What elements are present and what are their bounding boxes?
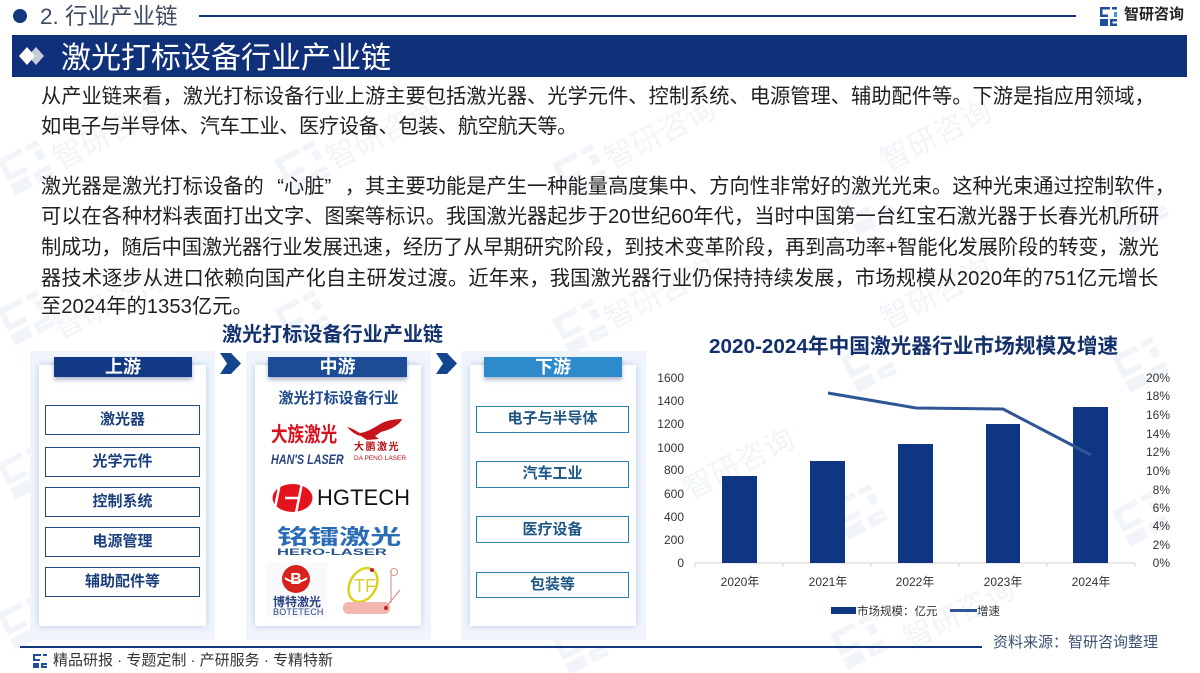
footer rule	[20, 646, 982, 648]
bar and line chart	[657, 371, 1170, 618]
laser paragraph: 可以在各种材料表面打出文字、图案等标识。我国激光器起步于20世纪60年代，当时中国第一台红宝石激光器于长春光机所研	[41, 206, 1159, 228]
item	[476, 516, 629, 543]
right axis: 6%	[1153, 501, 1170, 515]
x labels	[721, 575, 1110, 589]
right axis: 2%	[1153, 538, 1170, 552]
item: 电源管理	[92, 533, 152, 550]
footer text: 精品研报 · 专题定制 · 产研服务 · 专精特新	[53, 652, 333, 669]
watermark pattern: 智研咨询	[599, 92, 721, 176]
watermark pattern: 智研咨询	[48, 262, 170, 346]
watermark pattern: 智研咨询	[321, 92, 443, 176]
upstream heading	[54, 357, 192, 377]
left axis: 800	[664, 463, 684, 477]
item: 激光器	[100, 411, 145, 428]
footer tagline	[33, 652, 333, 669]
upstream card	[39, 365, 206, 626]
laser paragraph: 器技术逐步从进口依赖向国产化自主研发过渡。近年来，我国激光器行业仍保持持续发展，市场规模从2020年的751亿元增长	[41, 268, 1158, 290]
item	[45, 487, 200, 517]
logo: Han's Laser: 大族激光	[271, 423, 337, 446]
section title: 2. 行业产业链	[40, 4, 178, 29]
intro paragraph: 如电子与半导体、汽车工业、医疗设备、包装、航空航天等。	[41, 116, 577, 138]
logo: HGTECH: HGTECH	[317, 485, 410, 510]
logo text: 智研咨询	[1124, 6, 1184, 23]
left axis: 1600	[657, 371, 684, 385]
laser paragraph	[41, 176, 1175, 318]
midstream heading: 中游	[320, 357, 356, 377]
source note: 资料来源：智研咨询整理	[993, 634, 1158, 651]
logo: Han's Laser	[271, 423, 344, 467]
laser paragraph: “	[277, 176, 284, 198]
item	[45, 567, 200, 597]
item: 包装等	[530, 576, 575, 593]
left axis: 0	[677, 556, 684, 570]
logo: TF: TF	[354, 576, 376, 596]
downstream card	[470, 365, 636, 626]
laser paragraph: 制成功，随后中国激光器行业发展迅速，经历了从早期研究阶段，到技术变革阶段，再到高功率+智能化发展阶段的转变，激光	[41, 237, 1159, 259]
logo: Hero Laser: HERO-LASER	[277, 547, 387, 558]
upstream heading: 上游	[105, 357, 141, 377]
legend: 市场规模：亿元	[857, 604, 938, 618]
logo: Bote Tech: BOTETECH	[273, 607, 324, 617]
downstream heading: 下游	[535, 357, 571, 377]
downstream heading	[484, 357, 622, 377]
arrow	[436, 353, 457, 374]
intro paragraph	[41, 85, 1155, 138]
logo: Da Peng Laser	[347, 419, 406, 462]
section bullet	[13, 9, 27, 23]
chain title: 激光打标设备行业产业链	[222, 324, 443, 346]
logo mark	[1100, 7, 1117, 26]
right axis: 16%	[1146, 408, 1170, 422]
laser paragraph: ”	[325, 176, 331, 198]
x axis	[695, 563, 1135, 567]
item: 医疗设备	[522, 521, 582, 538]
midstream subtitle: 激光打标设备行业	[278, 390, 398, 407]
panel: midstream	[246, 351, 431, 640]
watermark pattern: 智研咨询	[875, 252, 997, 336]
logo: Hero Laser: 铭镭激光	[277, 526, 401, 549]
title banner	[12, 35, 1187, 77]
x labels: 2022年	[896, 575, 934, 589]
right axis: 0%	[1153, 556, 1170, 570]
item: 电子与半导体	[507, 410, 598, 427]
legend: 增速	[977, 604, 1000, 618]
laser paragraph: 至2024年的1353亿元。	[41, 296, 253, 318]
x labels: 2024年	[1072, 575, 1110, 589]
x labels: 2023年	[984, 575, 1022, 589]
logo: Da Peng Laser: DA PENG LASER	[354, 455, 406, 462]
x labels: 2020年	[721, 575, 759, 589]
item	[45, 527, 200, 557]
logo: Bote Tech	[267, 562, 327, 617]
logo: Bote Tech: 博特激光	[273, 595, 321, 609]
left axis: 1400	[657, 394, 684, 408]
header rule	[199, 15, 1076, 16]
item: 汽车工业	[522, 465, 582, 482]
right axis: 14%	[1146, 427, 1170, 441]
item	[45, 405, 200, 435]
right axis: 10%	[1146, 464, 1170, 478]
logo: Da Peng Laser: 大鹏激光	[354, 442, 400, 453]
watermark pattern: 智研咨询	[599, 252, 721, 336]
midstream card	[255, 365, 421, 626]
bars: market size	[722, 407, 1108, 563]
right axis: 8%	[1153, 483, 1170, 497]
left axis: 1200	[657, 417, 684, 431]
logo: brand	[1100, 6, 1184, 26]
panel: downstream	[461, 351, 646, 640]
watermark pattern: 智研咨询	[875, 94, 997, 178]
left axis: 600	[664, 487, 684, 501]
logo: HGTECH	[272, 484, 410, 512]
banner title: 激光打标设备行业产业链	[61, 42, 391, 75]
logo: Bote Tech: B	[290, 571, 302, 588]
watermark pattern: 智研咨询	[898, 572, 1020, 656]
item	[476, 461, 629, 488]
footer logo	[33, 654, 47, 668]
right axis: 12%	[1146, 445, 1170, 459]
watermark pattern: 智研咨询	[48, 92, 170, 176]
item	[476, 572, 629, 598]
section header	[13, 4, 1076, 29]
item: 辅助配件等	[85, 573, 160, 590]
banner icon: diamonds	[19, 47, 44, 65]
logo: TF	[343, 566, 400, 614]
item	[476, 406, 629, 433]
logo: Han's Laser: HAN'S LASER	[271, 451, 344, 467]
arrow	[220, 353, 241, 374]
midstream heading	[268, 357, 407, 377]
item: 控制系统	[92, 493, 152, 510]
panel: upstream	[30, 351, 215, 640]
left axis: 400	[664, 510, 684, 524]
watermark pattern: 智研咨询	[678, 422, 800, 506]
x labels: 2021年	[809, 575, 847, 589]
left axis: 1000	[657, 441, 684, 455]
left axis: 200	[664, 533, 684, 547]
right axis: 20%	[1146, 371, 1170, 385]
right axis: 18%	[1146, 389, 1170, 403]
legend	[831, 604, 1000, 618]
right axis	[1146, 371, 1170, 570]
item: 光学元件	[92, 453, 152, 470]
growth line	[828, 393, 1091, 455]
laser paragraph: 激光器是激光打标设备的 心脏 ，其主要功能是产生一种能量高度集中、方向性非常好的激光光束。这种光束通过控制软件，	[41, 176, 1175, 198]
left axis	[657, 371, 684, 570]
chart title: 2020-2024年中国激光器行业市场规模及增速	[709, 335, 1118, 358]
item	[45, 447, 200, 477]
right axis: 4%	[1153, 519, 1170, 533]
intro paragraph: 从产业链来看，激光打标设备行业上游主要包括激光器、光学元件、控制系统、电源管理、辅助配件等。下游是指应用领域，	[41, 86, 1155, 108]
